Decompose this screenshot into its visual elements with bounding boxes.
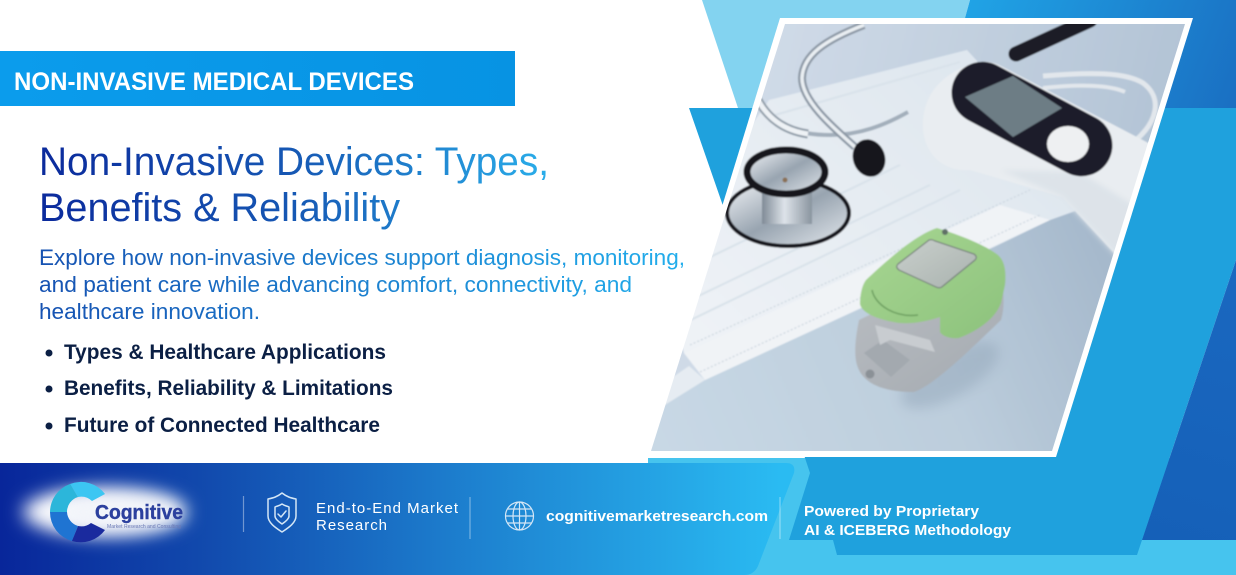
bullet list: Types & Healthcare Applications (64, 340, 386, 364)
white cable (1043, 74, 1155, 145)
stethoscope chestpiece (727, 150, 849, 246)
title: Non-Invasive Devices: Types, (39, 140, 549, 184)
photo frame: medical devices (640, 18, 1200, 470)
intro paragraph: Explore how non-invasive devices support diagnosis, monitoring, (39, 245, 685, 270)
stethoscope ear tip (852, 138, 886, 178)
bullet list (46, 340, 393, 437)
footer band (0, 463, 794, 575)
website address: cognitivemarketresearch.com (546, 508, 768, 525)
icon: shield (268, 493, 296, 532)
bullet list: Benefits, Reliability & Limitations (64, 376, 393, 400)
methodology text: Powered by Proprietary (804, 504, 979, 520)
methodology text: AI & ICEBERG Methodology (804, 523, 1011, 539)
feature text: market research (316, 500, 459, 534)
pulse oximeter (855, 228, 1009, 422)
thermometer device (930, 60, 1148, 256)
methodology text (804, 504, 1011, 539)
header bar: NON-INVASIVE MEDICAL DEVICES (14, 68, 414, 96)
feature text: market research: Research (316, 517, 387, 534)
background geometric shapes (648, 0, 1236, 575)
surgical mask (666, 50, 1074, 405)
black cable (1016, 20, 1090, 54)
stethoscope tubing (758, 25, 908, 147)
bullet list: Future of Connected Healthcare (64, 413, 380, 437)
icon: globe (506, 502, 534, 530)
title (39, 140, 549, 230)
intro paragraph: healthcare innovation. (39, 299, 260, 324)
logo: Cognitive: Cognitive (95, 502, 183, 524)
logo: Cognitive (23, 482, 187, 542)
logo: Cognitive: Market Research and Consulting (107, 524, 181, 530)
intro paragraph (39, 245, 685, 324)
intro paragraph: and patient care while advancing comfort, connectivity, and (39, 272, 632, 297)
feature text: market research: End-to-End Market (316, 500, 459, 517)
divider lines (244, 496, 780, 539)
header bar (0, 51, 515, 106)
title: Benefits & Reliability (39, 186, 400, 230)
